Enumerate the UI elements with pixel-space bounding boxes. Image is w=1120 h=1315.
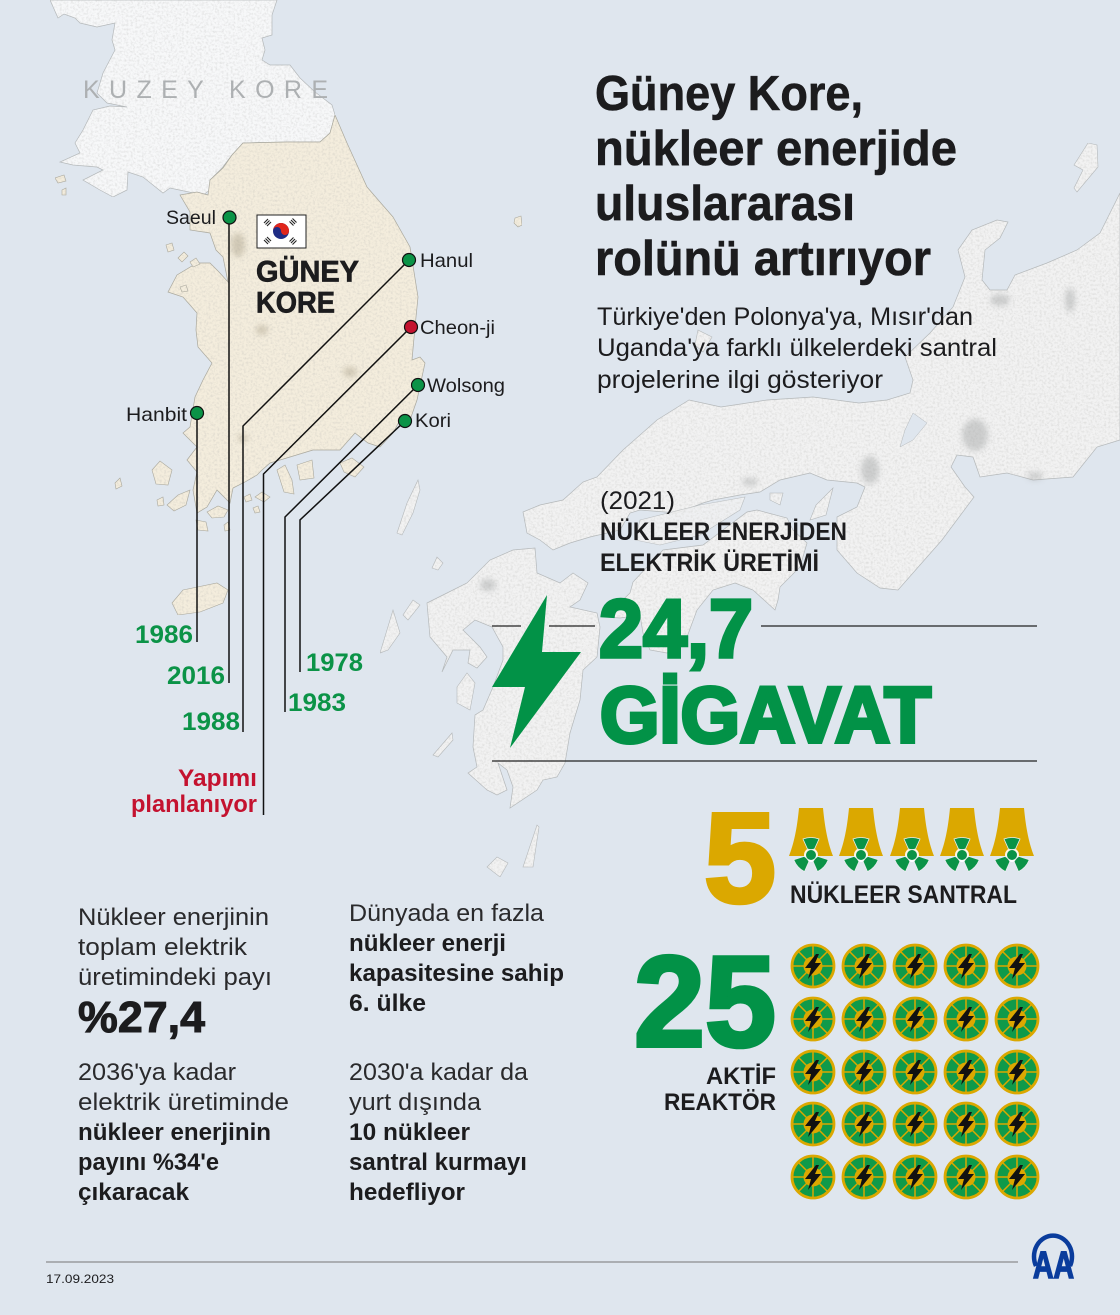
text block: world rank: Dünyada en fazla (349, 900, 544, 927)
stat heading (600, 487, 847, 577)
map: South Korea urban shading (231, 233, 357, 442)
pin: Wolsong: Wolsong (427, 375, 505, 397)
stat: 25 reactors number: 25 (634, 930, 776, 1074)
stat: 5 plants number: 5 (704, 787, 776, 930)
map label: Kuzey Kore: KUZEY KORE (83, 76, 328, 104)
subtitle: Uganda'ya farklı ülkelerdeki santral (597, 334, 997, 362)
text block: share of generation (78, 904, 272, 1042)
stat heading: ELEKTRİK ÜRETİMİ (600, 548, 819, 577)
logo: AA: AA (1033, 1245, 1074, 1287)
text block: 2036 target: payını %34'e (78, 1149, 219, 1176)
date: 17.09.2023 (46, 1272, 114, 1286)
map: Japanese islands (380, 143, 1098, 877)
year labels: 2016 (167, 662, 225, 690)
title: uluslararası (595, 177, 855, 231)
stat unit: Gigavat: GİGAVAT (600, 670, 931, 759)
icon: South Korea flag (257, 215, 306, 248)
text block: 2030 target: 2030'a kadar da (349, 1059, 528, 1086)
planned label: planlanıyor (131, 791, 257, 818)
text block: share of generation: üretimindeki payı (78, 964, 272, 991)
map: North Korea (50, 0, 335, 197)
connector lines (197, 217, 418, 815)
stat value: 24,7: 24,7 (599, 582, 753, 675)
text block: 2030 target: hedefliyor (349, 1179, 465, 1206)
text block: share of generation: toplam elektrik (78, 934, 248, 961)
text block: 2030 target: santral kurmayı (349, 1149, 527, 1176)
year labels: 1988 (182, 708, 240, 736)
stat heading: (2021) (600, 487, 675, 515)
year labels: 1986 (135, 621, 193, 649)
text block: share of generation: Nükleer enerjinin (78, 904, 269, 931)
pin: Kori: Kori (415, 410, 451, 432)
title: Güney Kore, (595, 67, 863, 121)
map: lake Biwa (900, 413, 927, 447)
title: rolünü artırıyor (595, 232, 931, 286)
text block: world rank: 6. ülke (349, 990, 426, 1017)
pin: Cheon-ji: Cheon-ji (420, 317, 495, 339)
label: active reactors (664, 1063, 776, 1116)
title (595, 67, 957, 286)
text block: 2036 target: nükleer enerjinin (78, 1119, 271, 1146)
text block: share of generation: %27,4 (78, 993, 206, 1042)
label: nuclear plants: NÜKLEER SANTRAL (790, 880, 1017, 909)
map: urban shading (480, 288, 1075, 591)
logo: AA (1033, 1236, 1074, 1287)
subtitle: Türkiye'den Polonya'ya, Mısır'dan (597, 303, 973, 331)
stat heading: NÜKLEER ENERJİDEN (600, 517, 847, 546)
map: Japan (380, 143, 1120, 877)
text block: world rank (349, 900, 564, 1017)
icons: reactor grid (792, 945, 1038, 1198)
icons: five nuclear plants (789, 808, 1034, 873)
pin: Kori (398, 410, 451, 432)
planned label (131, 765, 257, 818)
map: Korean islands (55, 175, 522, 615)
map: South Korea (55, 115, 522, 615)
rules around stat (492, 626, 1037, 761)
text block: 2036 target: çıkaracak (78, 1179, 189, 1206)
subtitle: projelerine ilgi gösteriyor (597, 366, 883, 394)
icon: lightning bolt (492, 595, 581, 748)
text block: 2030 target: 10 nükleer (349, 1119, 470, 1146)
text block: world rank: nükleer enerji (349, 930, 506, 957)
pin: Hanul: Hanul (420, 250, 473, 272)
pin: Hanbit: Hanbit (126, 404, 188, 426)
pin: Saeul: Saeul (166, 207, 216, 229)
country label: Güney Kore: KORE (256, 286, 335, 320)
text block: 2030 target: yurt dışında (349, 1089, 481, 1116)
label: active reactors: REAKTÖR (664, 1089, 776, 1116)
text block: 2036 target (78, 1059, 289, 1206)
text block: 2036 target: 2036'ya kadar (78, 1059, 236, 1086)
label: active reactors: AKTİF (706, 1063, 776, 1090)
year labels (135, 621, 363, 736)
text block: world rank: kapasitesine sahip (349, 960, 564, 987)
year labels: 1978 (306, 649, 363, 677)
country label: Güney Kore: GÜNEY (256, 256, 359, 288)
year labels: 1983 (288, 689, 346, 717)
footer rule (46, 1261, 1018, 1263)
planned label: Yapımı (178, 765, 257, 792)
text block: 2036 target: elektrik üretiminde (78, 1089, 289, 1116)
title: nükleer enerjide (595, 122, 957, 176)
country label: Güney Kore (256, 256, 359, 320)
text block: 2030 target (349, 1059, 528, 1206)
subtitle (597, 303, 997, 394)
